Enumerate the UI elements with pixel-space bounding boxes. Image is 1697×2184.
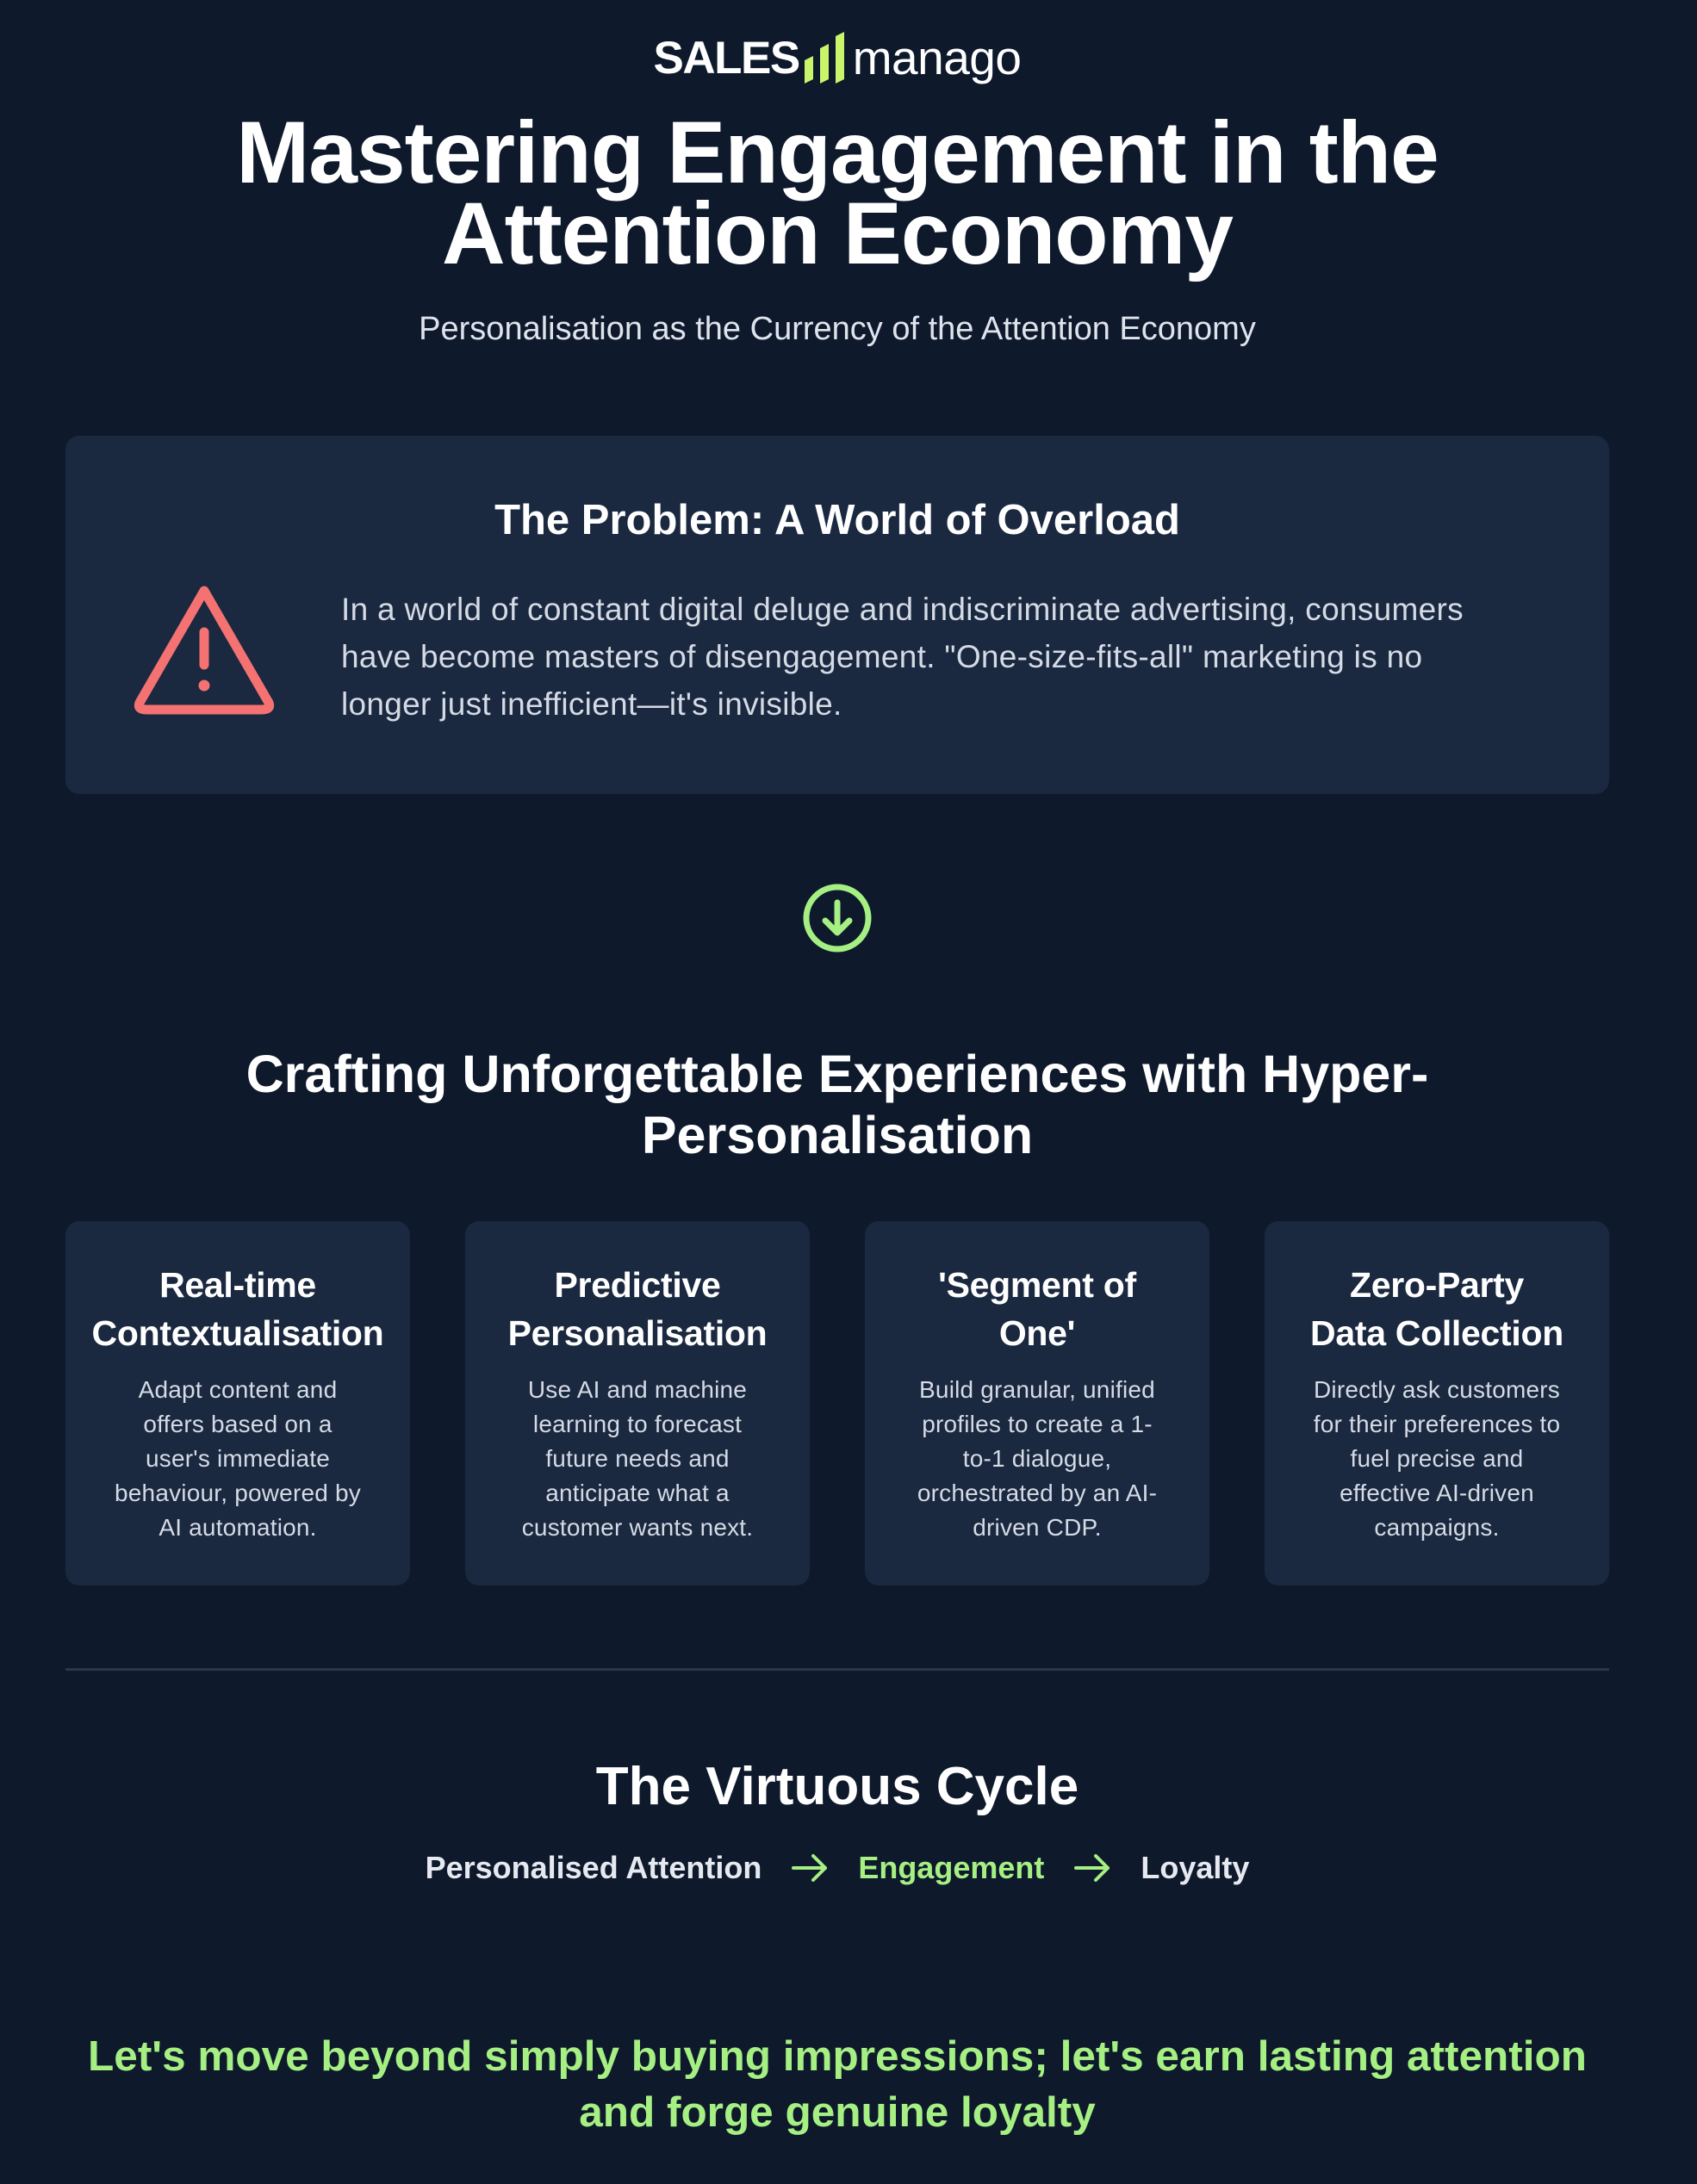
problem heading: The Problem: A World of Overload (494, 497, 1180, 543)
virtuous cycle heading: The Virtuous Cycle (596, 1757, 1078, 1816)
card: real-time: Adapt content and offers based on a user's immediate behaviour, powered by AI automation. (115, 1376, 361, 1541)
card: real-time: Real-time (159, 1265, 316, 1305)
card: predictive (465, 1221, 810, 1585)
card: real-time: Contextualisation (92, 1313, 383, 1353)
card: predictive: Predictive (555, 1265, 720, 1305)
title: Attention Economy (442, 184, 1233, 282)
closing statement (88, 2032, 1587, 2136)
logo: SALES (654, 33, 799, 83)
icon: warning (134, 586, 274, 715)
section heading: Personalisation (642, 1106, 1033, 1164)
cycle flow: Engagement (858, 1850, 1044, 1885)
card: segment of one: 'Segment of (938, 1265, 1136, 1305)
logo: manago (853, 31, 1021, 84)
section heading: Crafting Unforgettable Experiences with Hyper- (246, 1045, 1428, 1103)
section heading (246, 1045, 1428, 1164)
card: real-time (65, 1221, 410, 1585)
logo (654, 31, 1021, 84)
cycle flow (426, 1850, 1249, 1885)
card: segment of one: One' (999, 1313, 1075, 1353)
title: Mastering Engagement in the (236, 103, 1439, 202)
closing statement: and forge genuine loyalty (579, 2088, 1096, 2136)
problem text: In a world of constant digital deluge and indiscriminate advertising, consumers have become masters of disengagement. "One-size-fits-all" marketing is no longer just inefficient—it's invisible. (341, 592, 1464, 722)
card: predictive: Use AI and machine learning to forecast future needs and anticipate what a customer wants next. (522, 1376, 753, 1541)
title (236, 103, 1439, 282)
card: zero-party: Directly ask customers for their preferences to fuel precise and effective AI-driven campaigns. (1314, 1376, 1560, 1541)
icon: down arrow (803, 884, 872, 952)
closing statement: Let's move beyond simply buying impressions; let's earn lasting attention (88, 2032, 1587, 2080)
cycle flow: Personalised Attention (426, 1850, 761, 1885)
card: predictive: Personalisation (508, 1313, 767, 1353)
card: segment of one (865, 1221, 1209, 1585)
subtitle: Personalisation as the Currency of the Attention Economy (419, 311, 1256, 347)
card: zero-party: Data Collection (1310, 1313, 1563, 1353)
panel: problem (65, 436, 1609, 794)
cycle flow: Loyalty (1141, 1850, 1249, 1885)
card: segment of one: Build granular, unified profiles to create a 1-to-1 dialogue, orchestrated by an AI-driven CDP. (917, 1376, 1157, 1541)
card: zero-party (1265, 1221, 1609, 1585)
card: zero-party: Zero-Party (1350, 1265, 1524, 1305)
